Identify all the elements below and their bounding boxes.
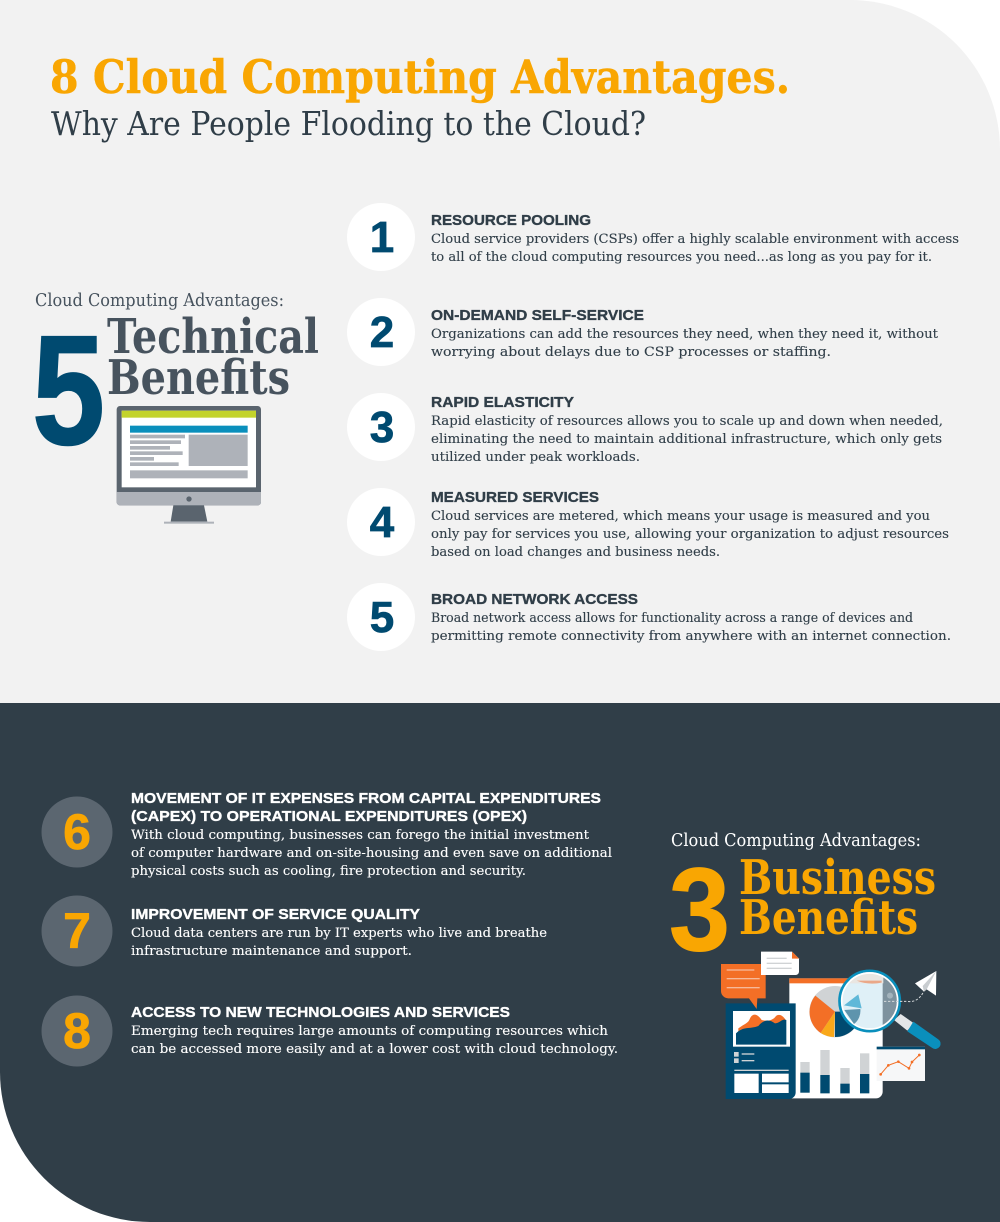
heading: 3 business benefits: 3 bbox=[669, 844, 730, 976]
list: business benefits bbox=[42, 790, 618, 1066]
item 6: capex to opex: 6 bbox=[63, 804, 91, 860]
item 2: on-demand self-service bbox=[347, 298, 939, 366]
item 5: broad network access: 5 bbox=[370, 593, 394, 642]
item 6: capex to opex bbox=[42, 790, 612, 879]
item 7: service quality: 7 bbox=[63, 903, 91, 959]
line chart card bbox=[877, 1047, 925, 1081]
heading: 3 business benefits: Cloud Computing Advantages: bbox=[671, 830, 921, 851]
heading: 5 technical benefits: Benefits bbox=[107, 350, 290, 406]
list: technical benefits bbox=[347, 203, 959, 651]
item 4: measured services: only pay for services you use, allowing your organization to adjust resources bbox=[431, 527, 949, 542]
panel: business benefits background bbox=[0, 703, 1000, 1222]
item 1: resource pooling: 1 bbox=[370, 213, 394, 262]
item 6: capex to opex: (CAPEX) TO OPERATIONAL EXPENDITURES (OPEX) bbox=[131, 808, 527, 825]
heading: 3 business benefits: Business bbox=[739, 850, 936, 906]
item 4: measured services: MEASURED SERVICES bbox=[431, 489, 599, 506]
item 3: rapid elasticity: Rapid elasticity of resources allows you to scale up and down when needed, bbox=[431, 414, 943, 429]
item 3: rapid elasticity bbox=[347, 393, 943, 465]
item 7: service quality bbox=[42, 896, 547, 966]
item 6: capex to opex: physical costs such as cooling, fire protection and security. bbox=[131, 864, 526, 879]
item 2: on-demand self-service: ON-DEMAND SELF-SERVICE bbox=[431, 307, 644, 324]
heading: 3 business benefits bbox=[669, 830, 936, 976]
report page bbox=[789, 978, 883, 1098]
item 5: broad network access bbox=[347, 583, 951, 651]
item 8: new technologies: can be accessed more easily and at a lower cost with cloud technology. bbox=[131, 1042, 618, 1057]
item 7: service quality: infrastructure maintenance and support. bbox=[131, 944, 412, 959]
title bbox=[50, 50, 790, 143]
item 3: rapid elasticity: RAPID ELASTICITY bbox=[431, 394, 574, 411]
item 3: rapid elasticity: eliminating the need to maintain additional infrastructure, which only gets bbox=[431, 432, 942, 447]
item 3: rapid elasticity: 3 bbox=[370, 403, 394, 452]
item 6: capex to opex: of computer hardware and on-site-housing and even save on additional bbox=[131, 846, 612, 861]
item 2: on-demand self-service: 2 bbox=[370, 308, 394, 357]
icon: desktop monitor bbox=[117, 406, 261, 524]
item 4: measured services: based on load changes and business needs. bbox=[431, 545, 720, 560]
item 6: capex to opex: MOVEMENT OF IT EXPENSES FROM CAPITAL EXPENDITURES bbox=[131, 790, 601, 807]
speech bubble bbox=[721, 964, 766, 1009]
item 6: capex to opex: With cloud computing, businesses can forego the initial investment bbox=[131, 828, 590, 843]
item 1: resource pooling bbox=[347, 203, 959, 271]
item 1: resource pooling: RESOURCE POOLING bbox=[431, 212, 591, 229]
title: 8 Cloud Computing Advantages. bbox=[50, 50, 790, 104]
bars bbox=[800, 1062, 810, 1093]
item 8: new technologies: Emerging tech requires large amounts of computing resources which bbox=[131, 1024, 609, 1039]
item 2: on-demand self-service: Organizations can add the resources they need, when they need it, without bbox=[431, 327, 939, 342]
tablet bbox=[726, 1003, 796, 1099]
icon: analytics illustration bbox=[721, 952, 941, 1099]
item 8: new technologies bbox=[42, 996, 618, 1066]
pie chart bbox=[809, 986, 861, 1037]
heading: 5 technical benefits: Technical bbox=[107, 309, 319, 365]
heading: 5 technical benefits: Cloud Computing Advantages: bbox=[35, 290, 284, 311]
magnifier lens bbox=[840, 970, 899, 1033]
panel: technical benefits background bbox=[0, 0, 1000, 703]
item 7: service quality: Cloud data centers are run by IT experts who live and breathe bbox=[131, 926, 547, 941]
heading: 5 technical benefits: 5 bbox=[32, 304, 105, 478]
item 1: resource pooling: to all of the cloud computing resources you need...as long as you pay for it. bbox=[431, 250, 932, 265]
item 5: broad network access: Broad network access allows for functionality across a range of devices and bbox=[431, 611, 913, 626]
item 3: rapid elasticity: utilized under peak workloads. bbox=[431, 450, 640, 465]
item 8: new technologies: ACCESS TO NEW TECHNOLOGIES AND SERVICES bbox=[131, 1004, 510, 1021]
item 5: broad network access: permitting remote connectivity from anywhere with an internet connection. bbox=[431, 629, 951, 644]
magnifier handle bbox=[894, 1014, 914, 1031]
item 4: measured services: 4 bbox=[370, 498, 395, 547]
item 2: on-demand self-service: worrying about delays due to CSP processes or staffing. bbox=[431, 345, 831, 360]
heading: 5 technical benefits bbox=[32, 290, 319, 478]
item 7: service quality: IMPROVEMENT OF SERVICE QUALITY bbox=[131, 906, 420, 923]
item 5: broad network access: BROAD NETWORK ACCESS bbox=[431, 591, 638, 608]
item 8: new technologies: 8 bbox=[63, 1003, 91, 1059]
item 4: measured services bbox=[347, 488, 949, 560]
note bbox=[761, 952, 799, 975]
heading: 3 business benefits: Benefits bbox=[739, 890, 918, 946]
paper plane bbox=[884, 991, 924, 1002]
item 1: resource pooling: Cloud service providers (CSPs) offer a highly scalable environment with access bbox=[431, 232, 959, 247]
item 4: measured services: Cloud services are metered, which means your usage is measured and you bbox=[431, 509, 930, 524]
title: Why Are People Flooding to the Cloud? bbox=[51, 104, 646, 143]
